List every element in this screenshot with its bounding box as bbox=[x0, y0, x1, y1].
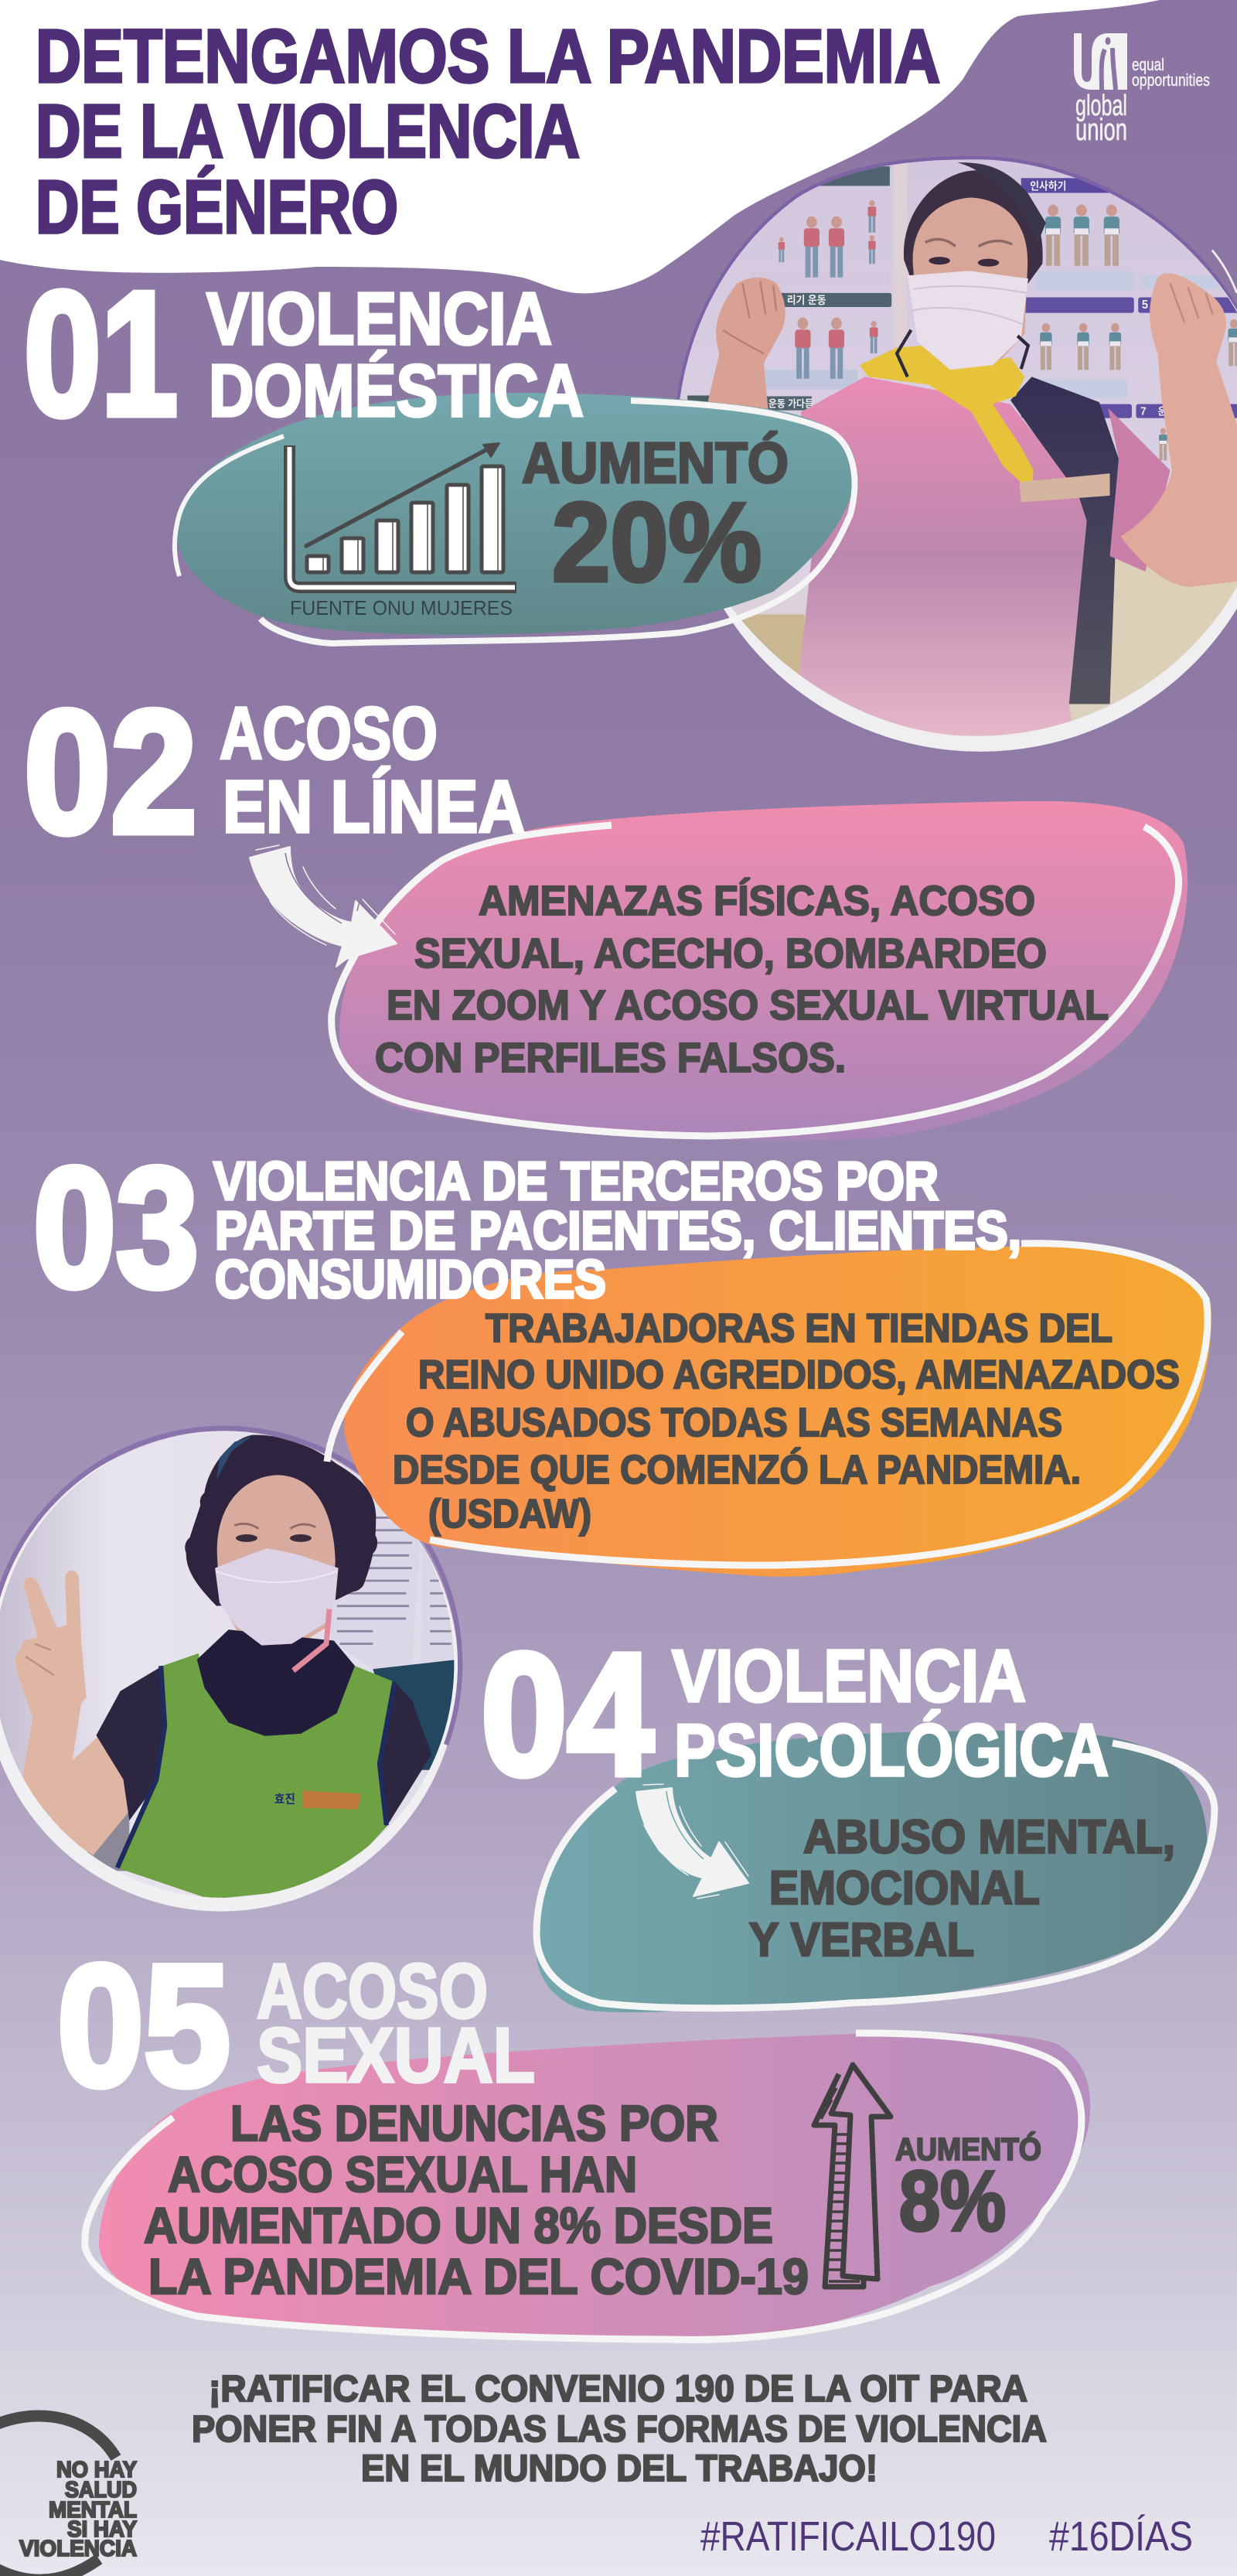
scarf bbox=[860, 346, 1034, 492]
bar chart icon bbox=[289, 443, 516, 588]
online harassment text bbox=[375, 878, 1109, 1081]
orange callout bbox=[344, 1247, 1211, 1577]
section 01 heading: DOMÉSTICA bbox=[209, 350, 584, 432]
photo: woman in pink raising fists bbox=[673, 155, 1237, 752]
pink strap bbox=[293, 1609, 329, 1670]
section 04 number: 04 bbox=[481, 1618, 653, 1811]
left arm and fist bbox=[708, 277, 785, 409]
panel: domestic violence 20% bbox=[175, 393, 856, 643]
section 05 heading: ACOSO bbox=[257, 1948, 488, 2035]
sexual harassment text: AUMENTADO UN 8% DESDE bbox=[144, 2197, 773, 2254]
psychological violence text: ABUSO MENTAL, bbox=[803, 1810, 1175, 1863]
section 05 number: 05 bbox=[57, 1929, 230, 2122]
hashtags: #RATIFICAILO190 bbox=[700, 2513, 996, 2560]
face bbox=[913, 197, 1027, 369]
name tag bbox=[1019, 473, 1110, 502]
white title shape bbox=[0, 0, 1160, 293]
badge: no hay salud mental si hay violencia: VIOLENCIA bbox=[19, 2537, 137, 2561]
stat: aumentó 20% bbox=[522, 431, 789, 605]
third party violence text: (USDAW) bbox=[428, 1492, 591, 1537]
section 03 number: 03 bbox=[33, 1132, 199, 1322]
third party violence text bbox=[393, 1306, 1180, 1537]
section 01 heading bbox=[206, 278, 584, 432]
right arm and fist bbox=[1120, 273, 1237, 587]
headband bbox=[957, 162, 1046, 235]
arrow: psychological violence bbox=[636, 1784, 748, 1899]
sleeve bbox=[1108, 408, 1171, 571]
photo: woman in pink raising fists: 리기 운동 bbox=[787, 294, 826, 306]
third party violence text: TRABAJADORAS EN TIENDAS DEL bbox=[486, 1306, 1113, 1351]
arm bbox=[22, 1704, 129, 1855]
third party violence text: DESDE QUE COMENZÓ LA PANDEMIA. bbox=[393, 1448, 1081, 1493]
photo: woman in green apron showing victory sign: 효진 bbox=[274, 1793, 295, 1807]
section 03 heading: CONSUMIDORES bbox=[215, 1249, 606, 1309]
black shirt bbox=[96, 1666, 165, 1820]
online harassment text: AMENAZAS FÍSICAS, ACOSO bbox=[479, 878, 1035, 924]
mask bbox=[215, 1548, 339, 1646]
dark vest panel bbox=[1010, 377, 1119, 704]
psychological violence text: Y VERBAL bbox=[749, 1913, 974, 1966]
panel: online harassment bbox=[332, 801, 1188, 1141]
section 02 heading: EN LÍNEA bbox=[223, 766, 525, 848]
call to action bbox=[192, 2369, 1047, 2489]
name tag bbox=[302, 1790, 361, 1810]
section 04 heading bbox=[672, 1635, 1109, 1792]
photo: woman in pink raising fists: 7 bbox=[1140, 405, 1147, 418]
photo: woman in pink raising fists: 5 bbox=[1142, 298, 1148, 312]
arrow: online harassment bbox=[250, 845, 397, 967]
stat: aumentó 20%: 20% bbox=[552, 479, 762, 605]
hand with two fingers bbox=[15, 1571, 87, 1718]
section 01 heading: VIOLENCIA bbox=[206, 278, 552, 360]
psychological violence text bbox=[749, 1810, 1175, 1966]
section 04 heading: PSICOLÓGICA bbox=[674, 1709, 1109, 1792]
call to action: EN EL MUNDO DEL TRABAJO! bbox=[361, 2448, 877, 2489]
stat: aumentó 8% bbox=[895, 2131, 1041, 2249]
lower gray bbox=[84, 1808, 129, 1871]
icon: up arrow bbox=[814, 2065, 891, 2287]
hair bbox=[186, 1435, 376, 1606]
stat: aumentó 8%: 8% bbox=[899, 2154, 1006, 2249]
logo: UNI global union equal opportunities: union bbox=[1075, 113, 1127, 147]
title: DE GÉNERO bbox=[36, 165, 398, 249]
section 01 number: 01 bbox=[24, 256, 178, 452]
photo: woman in pink raising fists: 운동 bbox=[1157, 406, 1174, 418]
badge: no hay salud mental si hay violencia: SALUD bbox=[65, 2478, 137, 2503]
badge: no hay salud mental si hay violencia: SI HAY bbox=[67, 2517, 137, 2542]
section 05 heading: SEXUAL bbox=[257, 2012, 535, 2099]
sexual harassment text: LAS DENUNCIAS POR bbox=[230, 2095, 718, 2151]
psychological violence text: EMOCIONAL bbox=[769, 1861, 1040, 1914]
section 03 heading bbox=[213, 1151, 1021, 1309]
face mask bbox=[908, 271, 1028, 370]
source label: FUENTE ONU MUJERES bbox=[290, 596, 513, 619]
photo: woman in pink raising fists: 운동 가다듬 bbox=[768, 398, 813, 410]
title: DE LA VIOLENCIA bbox=[36, 89, 580, 173]
panel: sexual harassment bbox=[85, 2032, 1090, 2340]
section 03 heading: VIOLENCIA DE TERCEROS POR bbox=[213, 1151, 939, 1211]
badge: no hay salud mental si hay violencia: NO HAY bbox=[56, 2458, 137, 2482]
section 02 heading: ACOSO bbox=[220, 692, 438, 775]
section 05 heading bbox=[257, 1948, 535, 2099]
third party violence text: REINO UNIDO AGREDIDOS, AMENAZADOS bbox=[418, 1353, 1180, 1397]
logo: UNI global union equal opportunities: opportunities bbox=[1132, 70, 1210, 90]
stat: aumentó 8%: AUMENTÓ bbox=[895, 2131, 1041, 2167]
title: DETENGAMOS LA PANDEMIA bbox=[36, 14, 940, 98]
online harassment text: SEXUAL, ACECHO, BOMBARDEO bbox=[414, 930, 1047, 977]
green apron bbox=[118, 1653, 394, 1899]
panel: third party violence bbox=[0, 1244, 1211, 1912]
collar bbox=[197, 1629, 355, 1736]
photo: woman in green apron showing victory sign bbox=[0, 1426, 472, 1912]
section 04 heading: VIOLENCIA bbox=[672, 1635, 1026, 1718]
call to action: ¡RATIFICAR EL CONVENIO 190 DE LA OIT PARA bbox=[209, 2369, 1027, 2410]
panel: psychological violence bbox=[537, 1731, 1215, 2012]
notice board bbox=[329, 1493, 421, 1669]
online harassment text: EN ZOOM Y ACOSO SEXUAL VIRTUAL bbox=[387, 982, 1109, 1029]
callout outline bbox=[327, 1244, 1208, 1565]
title bbox=[36, 14, 940, 249]
hashtags: #16DÍAS bbox=[1049, 2513, 1193, 2560]
call to action: PONER FIN A TODAS LAS FORMAS DE VIOLENCIA bbox=[192, 2409, 1047, 2450]
section 02 number: 02 bbox=[24, 674, 197, 869]
logo: UNI global union equal opportunities bbox=[1074, 33, 1210, 147]
face bbox=[217, 1475, 336, 1650]
badge: no hay salud mental si hay violencia: MENTAL bbox=[49, 2498, 137, 2523]
third party violence text: O ABUSADOS TODAS LAS SEMANAS bbox=[406, 1401, 1062, 1445]
online harassment text: CON PERFILES FALSOS. bbox=[375, 1035, 846, 1081]
section 03 heading: PARTE DE PACIENTES, CLIENTES, bbox=[215, 1200, 1021, 1261]
shirt bbox=[798, 377, 1087, 739]
stat: aumentó 20%: AUMENTÓ bbox=[522, 431, 789, 495]
logo: UNI global union equal opportunities: global bbox=[1075, 90, 1127, 122]
hair bbox=[904, 170, 1043, 283]
sexual harassment text bbox=[144, 2095, 809, 2305]
sexual harassment text: ACOSO SEXUAL HAN bbox=[168, 2146, 637, 2202]
badge: no hay salud mental si hay violencia bbox=[0, 2416, 137, 2576]
photo: woman in pink raising fists: 인사하기 bbox=[1030, 180, 1066, 193]
logo: UNI global union equal opportunities: equal bbox=[1132, 55, 1164, 74]
section 02 heading bbox=[220, 692, 525, 848]
sexual harassment text: LA PANDEMIA DEL COVID-19 bbox=[148, 2248, 809, 2305]
